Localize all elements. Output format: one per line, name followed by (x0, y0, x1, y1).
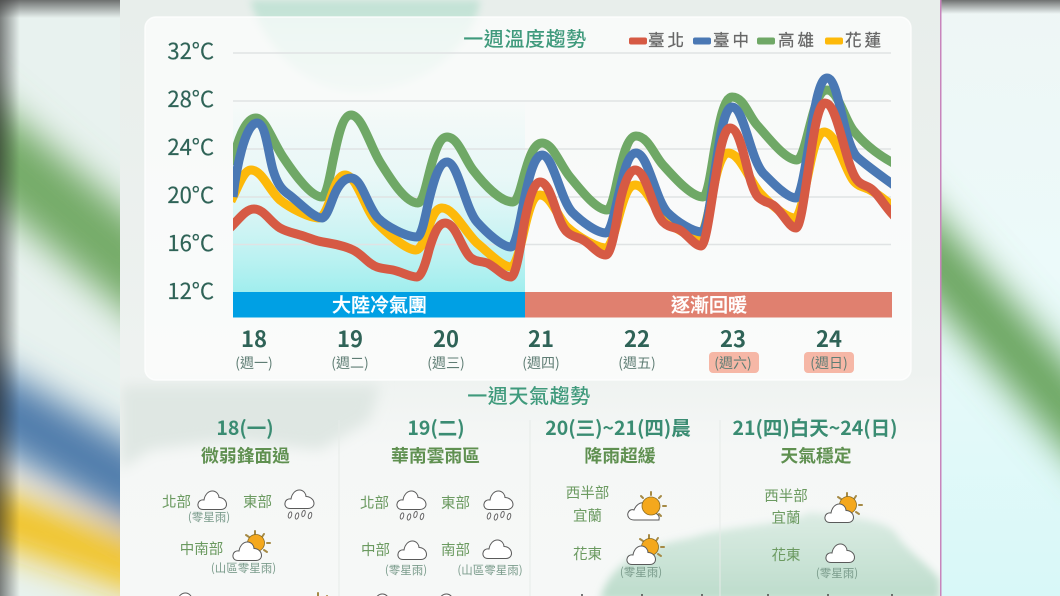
y axis labels: 24°C (167, 130, 214, 162)
icon: cloud (198, 491, 226, 510)
date axis: (週二) (331, 353, 369, 373)
legend (629, 27, 884, 51)
icon: cloud (826, 544, 854, 562)
banner: continental cold air mass: 大陸冷氣團 (332, 290, 427, 318)
panel: Tuesday 19 (360, 412, 523, 596)
y axis labels: 12°C (167, 274, 214, 306)
panel: Monday 18 (162, 412, 333, 596)
icon: rain cloud (484, 491, 513, 521)
panel: Tuesday 19: (山區零星雨) (457, 562, 523, 578)
panel: Tuesday 19: 華南雲雨區 (391, 442, 480, 468)
date axis: (週日) (810, 353, 848, 373)
panel: Wednesday 20 to Thursday 21 morning (545, 412, 702, 596)
pink image edge line (940, 0, 942, 596)
icon: sun in front of cloud (628, 492, 666, 520)
date axis: 18 (241, 322, 267, 354)
panel: Thursday 21 daytime to Sunday 24: 21(四)白天~24(日) (732, 412, 898, 441)
paper background with watercolor washes (120, 0, 940, 596)
weekend highlight badges (709, 352, 854, 373)
banner: gradually warming (525, 290, 892, 318)
icon: cloud (483, 540, 512, 558)
line: Kaohsiung (233, 90, 895, 210)
panel: Tuesday 19: 東部 (441, 492, 470, 513)
panel: weekly temperature trend (145, 17, 911, 380)
y axis labels: 32°C (167, 34, 214, 66)
blurred right side background (942, 0, 1060, 596)
icon: cropped sun row below (296, 593, 333, 596)
date axis: 23 (720, 322, 746, 354)
panel: Tuesday 19: 北部 (360, 492, 389, 513)
y axis labels: 28°C (167, 82, 214, 114)
panel: Monday 18: 微弱鋒面過 (201, 442, 290, 468)
panel: Wednesday 20 to Thursday 21 morning: 花東 (573, 543, 602, 564)
icon: cropped cloud row below right (432, 594, 460, 596)
date axis: 20 (433, 322, 459, 354)
panel: Tuesday 19: (零星雨) (385, 562, 427, 578)
date axis: 21 (528, 322, 554, 354)
panel: Monday 18: 東部 (243, 491, 272, 512)
date axis: (週一) (235, 353, 273, 373)
panel: Monday 18: (山區零星雨) (211, 560, 276, 576)
cold air background shading (233, 100, 525, 292)
date axis: (週四) (522, 353, 560, 373)
icon: rain cloud (285, 490, 314, 520)
legend: 臺北 (648, 27, 687, 51)
date axis: (週三) (427, 353, 465, 373)
line: Hualien (231, 132, 895, 267)
icon: cropped cloud row below (171, 593, 200, 596)
date axis (235, 322, 848, 373)
panel: Thursday 21 daytime to Sunday 24: 西半部 (764, 485, 808, 506)
legend: 花蓮 (845, 27, 884, 51)
panel: Monday 18: 中南部 (180, 538, 223, 559)
icon: cloud (398, 541, 426, 560)
section title: weekly weather trend: 一週天氣趨勢 (467, 380, 591, 409)
icon: sun behind cloud (233, 531, 270, 560)
panel: Thursday 21 daytime to Sunday 24: 花東 (772, 544, 800, 565)
icon: sun behind cloud (825, 493, 862, 522)
blurred left side background (0, 0, 120, 596)
date axis: 24 (816, 322, 842, 354)
line: Taipei (230, 103, 895, 277)
panel: Monday 18: (零星雨) (188, 509, 230, 525)
date axis: (週五) (618, 353, 656, 373)
y axis labels: 20°C (167, 178, 214, 210)
chart title: 一週溫度趨勢 (463, 23, 587, 52)
banner: continental cold air mass (233, 290, 525, 318)
panel: Tuesday 19: 19(二) (407, 412, 465, 441)
date axis: 22 (624, 322, 650, 354)
legend: 臺中 (713, 27, 752, 51)
panel: Wednesday 20 to Thursday 21 morning: 宜蘭 (573, 505, 602, 526)
icon: sun behind cloud (627, 535, 664, 564)
date axis: 19 (337, 322, 363, 354)
icon: cropped cloud row below (368, 594, 396, 596)
y axis labels (167, 34, 214, 306)
panel: Thursday 21 daytime to Sunday 24 (732, 412, 898, 596)
panel: Wednesday 20 to Thursday 21 morning: 西半部 (566, 482, 609, 503)
panel: Monday 18: 北部 (162, 491, 191, 512)
y axis labels: 16°C (167, 226, 214, 258)
panel: Tuesday 19: 南部 (441, 539, 470, 560)
panel: Tuesday 19: 中部 (361, 539, 390, 560)
panel: Thursday 21 daytime to Sunday 24: 天氣穩定 (780, 442, 852, 468)
panel: Thursday 21 daytime to Sunday 24: (零星雨) (816, 565, 858, 581)
banner: gradually warming: 逐漸回暖 (671, 290, 747, 318)
date axis: (週六) (714, 353, 752, 373)
panel: Monday 18: 18(一) (216, 412, 274, 441)
line chart: four cities (230, 78, 895, 277)
icon: rain cloud (397, 491, 426, 521)
panel: Thursday 21 daytime to Sunday 24: 宜蘭 (772, 507, 800, 528)
panel: Wednesday 20 to Thursday 21 morning: 20(三)~21(四)晨 (545, 412, 691, 441)
panel: Wednesday 20 to Thursday 21 morning: 降雨超緩 (584, 442, 656, 468)
panel: Wednesday 20 to Thursday 21 morning: (零星雨) (620, 564, 662, 580)
line: Taichung (233, 78, 895, 247)
legend: 高雄 (778, 27, 817, 51)
